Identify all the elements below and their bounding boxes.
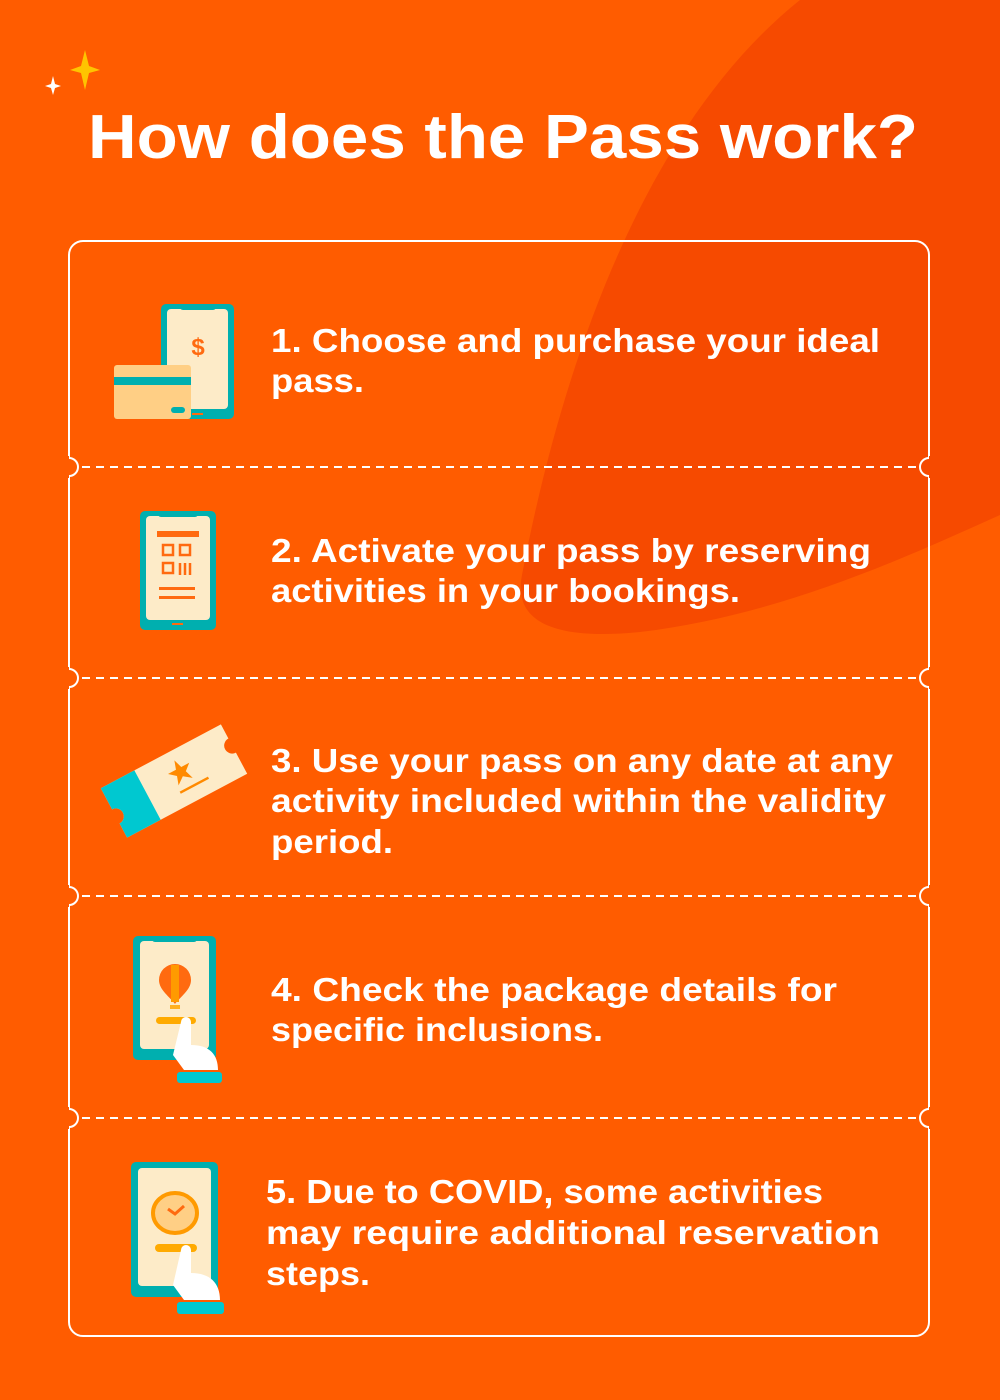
step 2 text: activities in your bookings.	[271, 572, 740, 609]
step 5 text: steps.	[266, 1255, 370, 1292]
step 5 text: 5. Due to COVID, some activities	[266, 1173, 823, 1210]
background blob	[521, 0, 1000, 634]
step 1 text	[271, 322, 880, 399]
step 2 text	[271, 532, 871, 609]
icon: phone with QR	[140, 511, 216, 630]
icon: ticket	[101, 724, 247, 838]
step 2 text: 2. Activate your pass by reserving	[271, 532, 871, 569]
step 3 text	[271, 742, 894, 860]
step 3 text: period.	[271, 823, 393, 860]
step 1 text: pass.	[271, 362, 364, 399]
step 4 text	[271, 971, 837, 1048]
step 4 text: specific inclusions.	[271, 1011, 603, 1048]
step 5 text: may require additional reservation	[266, 1214, 880, 1251]
step 5 text	[266, 1173, 880, 1292]
step 4 text: 4. Check the package details for	[271, 971, 837, 1008]
panel: steps card	[55, 241, 943, 1336]
step 1 text: 1. Choose and purchase your ideal	[271, 322, 880, 359]
icon: phone with clock	[131, 1162, 224, 1314]
step 3 text: 3. Use your pass on any date at any	[271, 742, 894, 779]
title: How does the Pass work?	[88, 103, 918, 172]
sparkle icons	[45, 50, 100, 95]
icon: phone and card	[114, 304, 234, 419]
icon: phone and card: $	[191, 334, 205, 361]
step 3 text: activity included within the validity	[271, 782, 887, 819]
icon: phone with balloon	[133, 936, 222, 1083]
